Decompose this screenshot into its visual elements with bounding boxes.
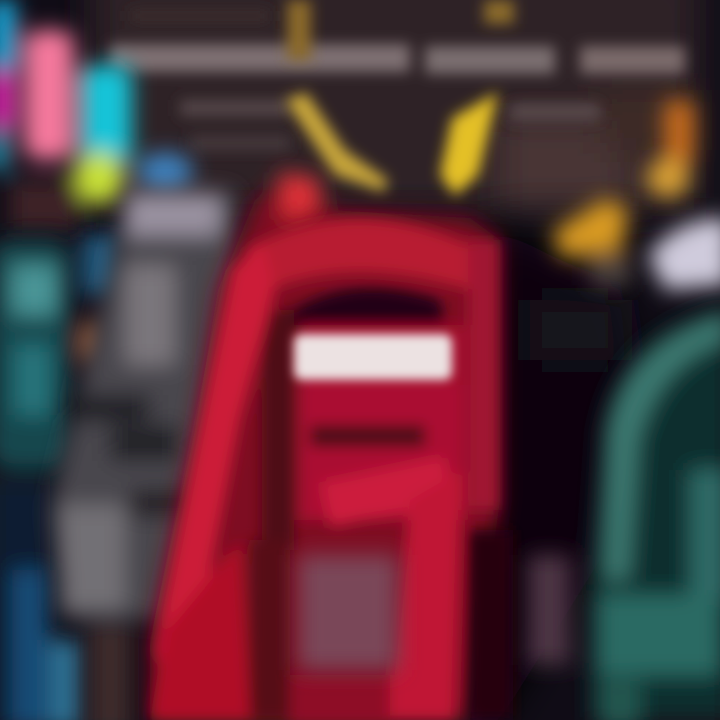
panel: yellow straps	[285, 0, 514, 196]
panel: dark person on the right	[470, 225, 650, 720]
backpack body	[150, 172, 500, 720]
blurred patch on pocket	[298, 555, 398, 670]
panel: right teal backpack	[528, 305, 720, 720]
panel: left person with teal backpack	[0, 235, 120, 720]
panel: left colour posters	[0, 0, 193, 230]
panel: grey jacket person	[50, 190, 245, 720]
panel: right white shape	[648, 218, 720, 290]
panel: red backpack	[150, 172, 513, 720]
white label	[294, 334, 452, 380]
blurred heading text	[110, 10, 685, 150]
background wall: top band	[90, 0, 700, 210]
backpack shading	[150, 219, 513, 720]
panel: right orange and yellow straps	[552, 100, 694, 285]
